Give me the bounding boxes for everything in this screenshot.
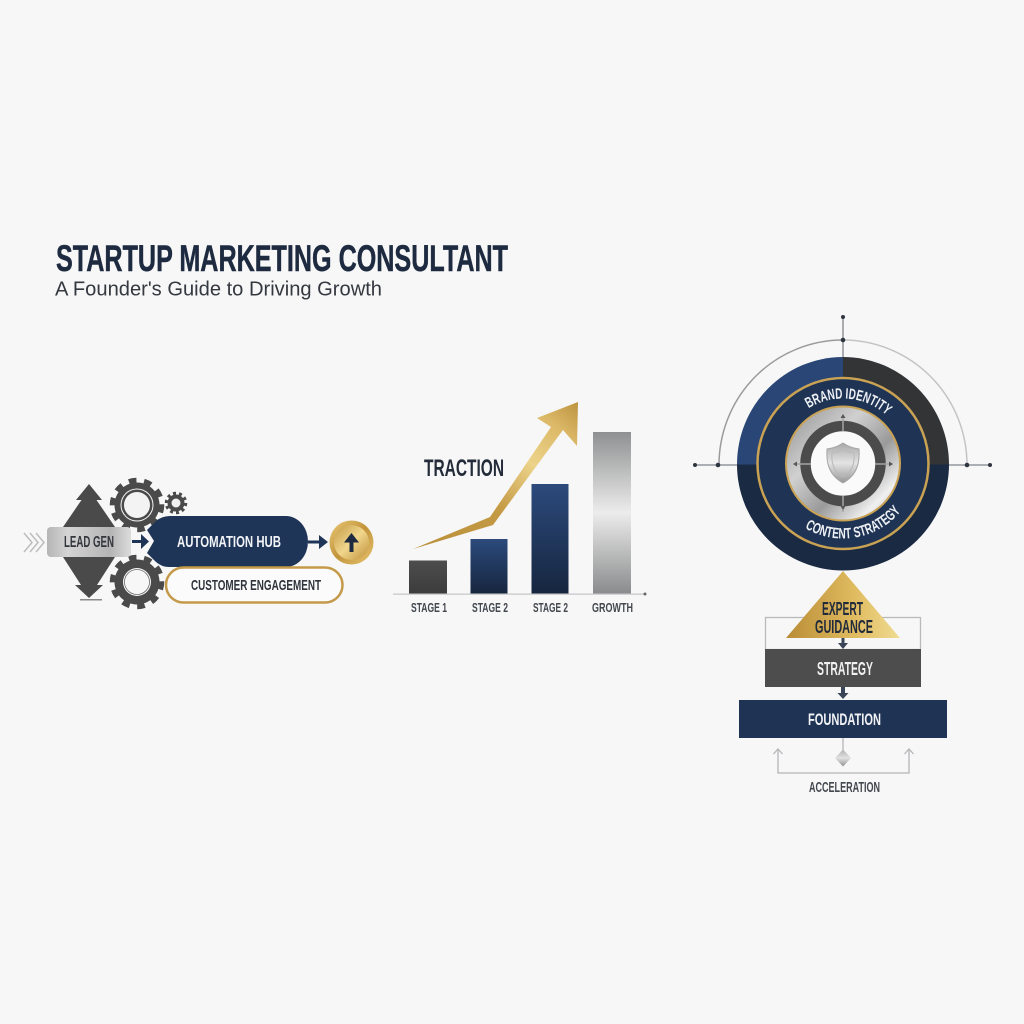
icon: large bottom gear	[113, 558, 161, 606]
icon: large top gear	[113, 481, 161, 529]
arrow: lead gen to hub	[132, 534, 149, 549]
middle navy ring with gold border	[758, 378, 928, 549]
outline frame	[766, 618, 920, 650]
bar: stage 2 second	[532, 484, 568, 594]
panel: traction bar chart	[393, 402, 646, 615]
icon: gold up-arrow coin	[330, 520, 374, 564]
chart baseline	[393, 592, 646, 596]
customer engagement pill	[166, 568, 342, 602]
curved label: brand identity: BRAND IDENTITY	[804, 388, 893, 414]
bar: stage 1	[409, 560, 447, 594]
arrow: hub to gold circle	[308, 535, 328, 549]
crosshair arc and axes	[693, 315, 992, 467]
arrow: strategy to foundation	[838, 687, 848, 699]
bar: stage 2	[470, 539, 508, 594]
icon: silver diamond	[835, 750, 851, 766]
automation hub pill: AUTOMATION HUB	[177, 534, 281, 551]
outer ring quadrants	[737, 357, 949, 570]
label: stage 2 second: STAGE 2	[533, 600, 568, 615]
icon: small gear	[166, 494, 186, 512]
expert guidance triangle	[786, 571, 900, 638]
panel: guidance hierarchy	[739, 571, 947, 796]
acceleration bracket with arrows	[774, 738, 914, 773]
customer engagement pill: CUSTOMER ENGAGEMENT	[191, 577, 321, 594]
expert guidance triangle: GUIDANCE	[815, 617, 873, 637]
expert guidance triangle: EXPERT	[822, 599, 863, 619]
bar: growth	[593, 432, 631, 594]
curved label: content strategy: CONTENT STRATEGY	[806, 504, 900, 538]
automation hub pill	[147, 516, 308, 567]
silver ring with gold border	[786, 406, 900, 520]
label: growth: GROWTH	[592, 600, 633, 615]
dark inner ring	[806, 426, 880, 501]
lead gen box: LEAD GEN	[64, 534, 114, 551]
arrow: growth trend	[413, 402, 578, 549]
panel: automation flow	[24, 481, 374, 606]
lead gen box	[47, 527, 131, 557]
strategy box: STRATEGY	[817, 659, 873, 679]
icon: input chevrons	[24, 533, 44, 552]
ring crosshair ticks	[793, 414, 893, 512]
arrow: guidance to strategy	[838, 638, 848, 649]
subtitle: A Founder's Guide to Driving Growth	[55, 278, 382, 300]
heading: traction: TRACTION	[424, 455, 504, 482]
strategy box	[765, 649, 921, 687]
label: stage 2: STAGE 2	[472, 600, 508, 615]
icon: shield	[827, 443, 859, 483]
foundation box	[739, 700, 947, 738]
label: stage 1: STAGE 1	[411, 600, 447, 615]
icon: double-headed diamond arrow	[63, 484, 115, 600]
title: STARTUP MARKETING CONSULTANT	[56, 237, 508, 279]
panel: brand target wheel	[693, 315, 992, 570]
foundation box: FOUNDATION	[808, 710, 881, 729]
label: acceleration: ACCELERATION	[809, 780, 880, 796]
